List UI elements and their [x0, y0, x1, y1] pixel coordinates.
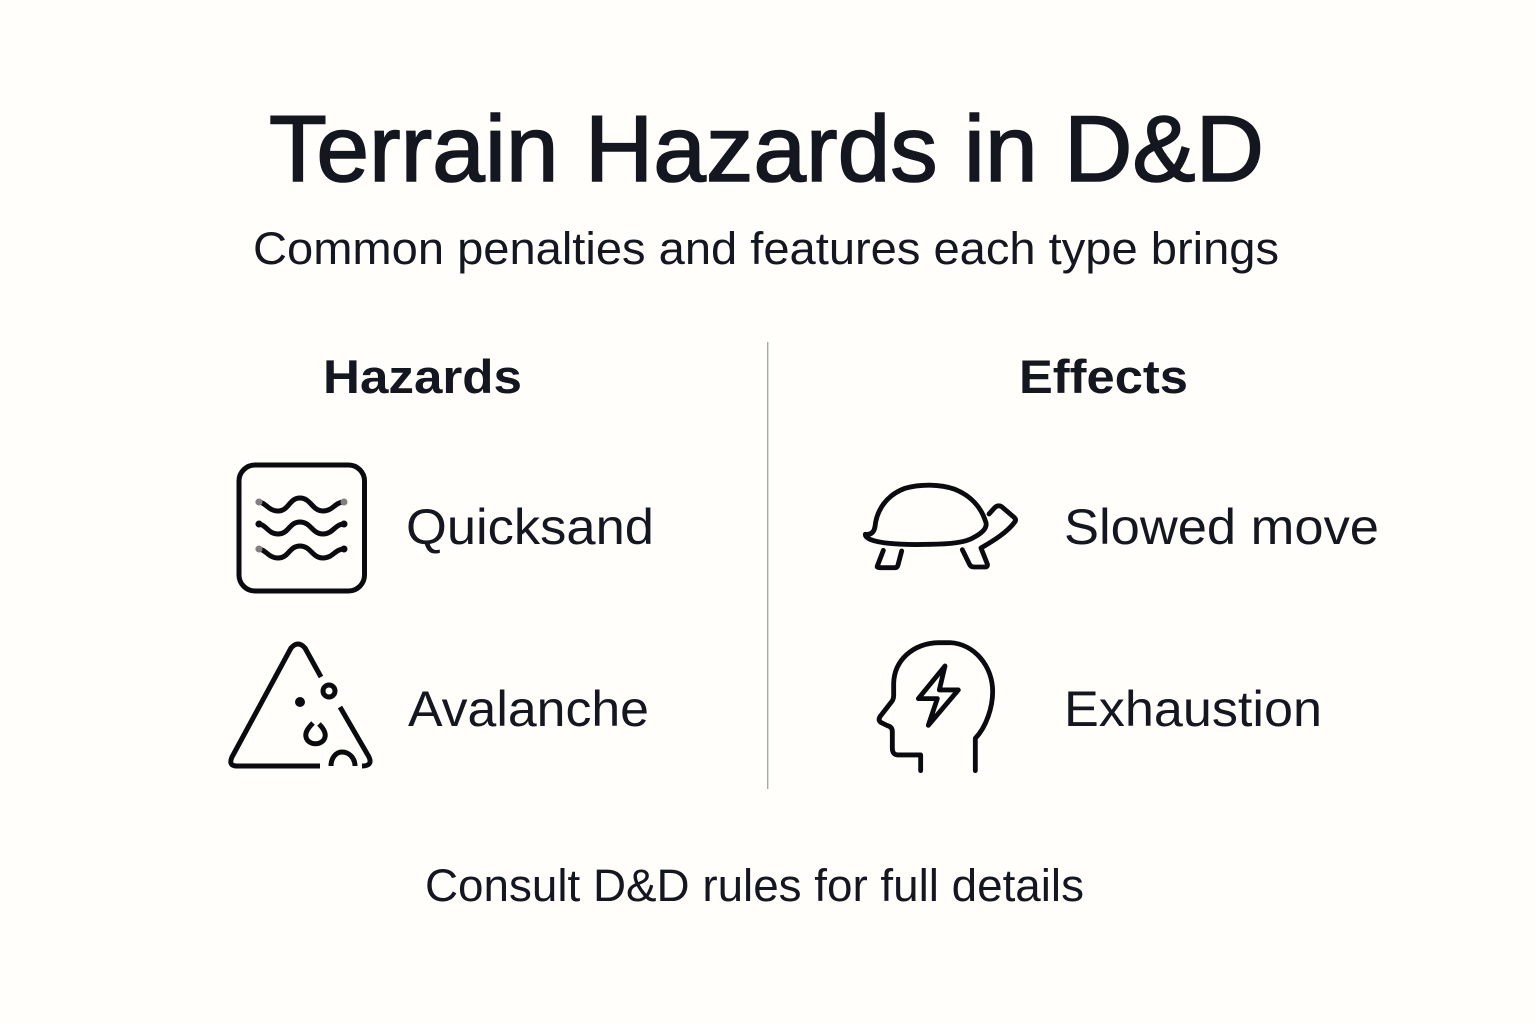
label: avalanche: Avalanche	[408, 681, 649, 737]
icon: turtle	[865, 485, 1016, 568]
label: exhaustion: Exhaustion	[1064, 681, 1322, 737]
icon: head with lightning bolt	[879, 643, 993, 771]
subtitle: Common penalties and features each type brings	[253, 223, 1279, 274]
label: slowed move: Slowed move	[1064, 499, 1379, 555]
heading: hazards: Hazards	[323, 350, 522, 403]
icon: avalanche	[231, 644, 370, 766]
heading: effects: Effects	[1019, 350, 1188, 403]
title: Terrain Hazards in D&D	[269, 96, 1264, 201]
label: quicksand: Quicksand	[406, 499, 654, 555]
icon: quicksand	[239, 465, 364, 591]
footer note: Consult D&D rules for full details	[425, 860, 1084, 911]
